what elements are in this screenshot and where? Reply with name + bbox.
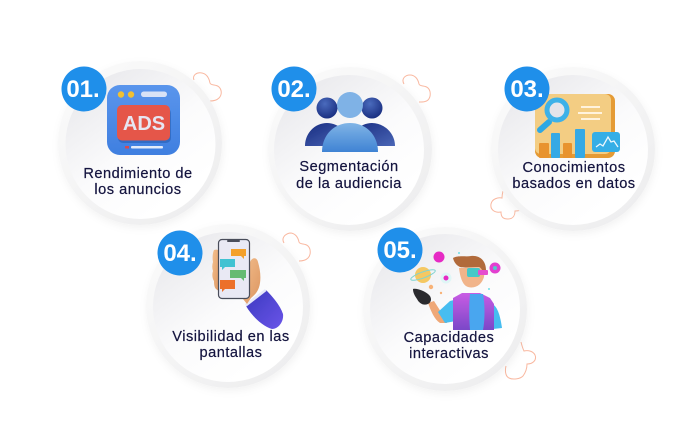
badge: 02: 02. — [277, 76, 311, 103]
badge: 01 — [62, 66, 106, 112]
badge: 03: 03. — [510, 76, 544, 103]
icon: person with VR glasses — [410, 252, 502, 330]
badge: 02 — [272, 66, 316, 112]
label: de la audiencia — [296, 176, 402, 192]
decorative heart: card 2 — [403, 75, 430, 102]
decorative heart: card 5 — [505, 342, 536, 379]
label: Capacidades — [404, 330, 494, 346]
panel: Capacidades interactivas — [363, 227, 527, 391]
badge: 04: 04. — [163, 240, 197, 267]
badge: 03 — [504, 66, 550, 112]
panel: Rendimiento de los anuncios — [58, 61, 222, 225]
label: interactivas — [409, 346, 489, 362]
label: pantallas — [200, 345, 262, 361]
label: Visibilidad en las — [172, 329, 290, 345]
label: Rendimiento de — [83, 166, 193, 182]
icon: group of people — [305, 92, 395, 152]
label: basados en datos — [512, 176, 636, 192]
decorative heart: card 1 — [194, 73, 221, 101]
icon: ads window — [107, 85, 180, 155]
label: Segmentación — [299, 159, 399, 175]
icon: ads window: ADS — [123, 113, 165, 135]
decorative heart: card 3 — [491, 191, 525, 219]
label: Conocimientos — [522, 160, 626, 176]
decorative heart: card 4 — [283, 233, 310, 261]
badge: 01: 01. — [66, 76, 100, 103]
badge: 05: 05. — [383, 237, 417, 264]
panel: Conocimientos basados en datos — [491, 67, 655, 231]
panel: Visibilidad en las pantallas — [146, 224, 310, 388]
panel: Segmentación de la audiencia — [268, 67, 432, 231]
badge: 04 — [158, 230, 202, 276]
icon: data dashboard — [535, 94, 620, 158]
badge: 05 — [378, 228, 422, 272]
icon: hand holding phone — [212, 240, 283, 329]
label: los anuncios — [94, 182, 182, 198]
